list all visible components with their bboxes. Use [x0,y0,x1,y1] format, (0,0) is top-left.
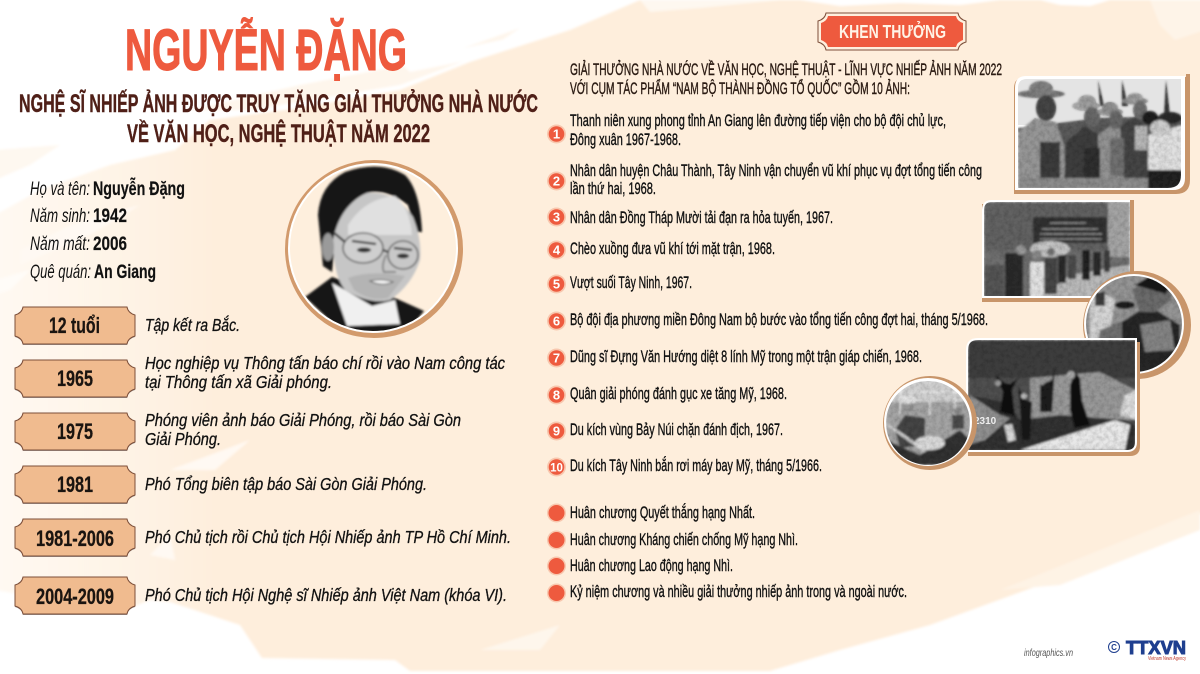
medal 3 [547,556,733,576]
timeline row: 1975: Giải Phóng. [145,429,221,449]
award heading: VỚI CỤM TÁC PHẨM “NAM BỘ THÀNH ĐỒNG TỔ QUỐC” GỒM 10 ẢNH: [570,78,910,98]
subtitle: NGHỆ SĨ NHIẾP ẢNH ĐƯỢC TRUY TẶNG GIẢI THƯỞNG NHÀ NƯỚC [19,88,538,118]
item 4: 4 [553,242,561,258]
section badge: khen thưởng [818,13,966,50]
item 5: 5 [553,276,560,292]
timeline row: 1965: 1965 [57,366,93,391]
item 8: Quân giải phóng đánh gục xe tăng Mỹ, 1968. [570,385,787,403]
medal 4 [547,583,907,602]
timeline row: 1975 [15,410,461,451]
logo: TTXVN: C [1111,643,1117,652]
timeline row: 12 tuổi: Tập kết ra Bắc. [145,315,240,335]
personal details: Họ và tên: [30,179,90,200]
item 1: 1 [553,126,560,142]
photo: crashed aircraft with guerrillas [966,338,1140,456]
item 6: Bộ đội địa phương miền Đông Nam bộ bước vào tổng tiến công đợt hai, tháng 5/1968. [570,311,988,329]
item 10 [547,456,822,476]
personal details: Nguyễn Đặng [93,178,185,200]
timeline row: 2004-2009: Phó Chủ tịch Hội Nghệ sĩ Nhiếp ảnh Việt Nam (khóa VI). [145,585,507,605]
timeline row: 12 tuổi: 12 tuổi [49,313,100,338]
item 8: 8 [553,388,560,402]
item 2: lần thứ hai, 1968. [570,180,656,198]
medals list [547,503,907,602]
item 7 [547,348,922,368]
portrait photo [285,160,463,338]
item 6: 6 [553,314,560,328]
personal details: An Giang [94,262,156,283]
item 2: 2 [553,174,560,188]
photo: soldiers lined up [1014,74,1190,194]
item 5: Vượt suối Tây Ninh, 1967. [570,274,692,292]
logo: TTXVN [1108,638,1186,662]
logo: TTXVN: Vietnam News Agency [1148,656,1186,662]
item 9: 9 [553,424,560,438]
medal 1 [547,503,755,522]
timeline row: 12 tuổi [15,307,240,345]
item 3: Nhân dân Đồng Tháp Mười tải đạn ra hỏa tuyến, 1967. [570,209,833,227]
personal details: 2006 [93,234,127,255]
item 9 [547,421,783,440]
logo: TTXVN: TTXVN [1126,638,1186,658]
timeline row: 1965: tại Thông tấn xã Giải phóng. [145,372,332,392]
personal details [30,178,185,283]
item 8 [547,385,787,404]
timeline [15,307,511,615]
item 9: Du kích vùng Bảy Núi chặn đánh địch, 1967. [570,421,783,439]
title: NGUYỄN ĐẶNG [125,18,407,83]
photo: crashed aircraft with guerrillas: 2310 [974,416,997,427]
item 5 [547,274,692,294]
timeline row: 2004-2009: 2004-2009 [36,584,114,609]
timeline row: 1981-2006 [15,519,511,557]
medal 1: Huân chương Quyết thắng hạng Nhất. [570,503,755,522]
timeline row: 1981: 1981 [57,472,93,497]
source credit: infographics.vn [1024,648,1073,659]
item 4 [547,240,775,260]
medal 4: Kỷ niệm chương và nhiều giải thưởng nhiếp ảnh trong và ngoài nước. [570,583,907,601]
personal details: Năm mất: [30,234,90,255]
award heading [570,60,1002,98]
item 1: Thanh niên xung phong tỉnh An Giang lên đường tiếp viện cho bộ đội chủ lực, [570,112,946,130]
medal 2: Huân chương Kháng chiến chống Mỹ hạng Nhì. [570,531,798,549]
item 7: 7 [553,350,560,366]
timeline row: 1965: Học nghiệp vụ Thông tấn báo chí rồi vào Nam công tác [145,353,505,373]
subtitle: VỀ VĂN HỌC, NGHỆ THUẬT NĂM 2022 [127,118,430,148]
item 3: 3 [553,210,560,224]
item 1 [547,112,946,149]
medal 3: Huân chương Lao động hạng Nhì. [570,557,733,575]
item 6 [547,311,988,330]
item 10: Du kích Tây Ninh bắn rơi máy bay Mỹ, tháng 5/1966. [570,456,822,475]
item 3 [547,208,833,227]
timeline row: 1981: Phó Tổng biên tập báo Sài Gòn Giải Phóng. [145,474,427,494]
medal 2 [547,530,798,550]
timeline row: 1965 [15,353,505,398]
photo: villagers marching under banner [982,200,1134,302]
item 2 [547,162,982,198]
timeline row: 1975: 1975 [57,419,93,444]
timeline row: 1981 [15,466,427,504]
item 4: Chèo xuồng đưa vũ khí tới mặt trận, 1968. [570,240,775,258]
item 1: Đông xuân 1967-1968. [570,131,681,149]
photo: circular portrait of soldier [1083,271,1191,379]
item 7: Dũng sĩ Đựng Văn Hướng diệt 8 lính Mỹ trong một trận giáp chiến, 1968. [570,348,922,366]
personal details: Năm sinh: [30,206,90,227]
personal details: 1942 [93,206,127,227]
timeline row: 1975: Phóng viên ảnh báo Giải Phóng, rồi báo Sài Gòn [145,410,461,430]
timeline row: 1981-2006: Phó Chủ tịch rồi Chủ tịch Hội Nhiếp ảnh TP Hồ Chí Minh. [145,527,511,547]
numbered photo list [547,112,988,476]
photo: circular rower on boat [883,376,977,470]
timeline row: 2004-2009 [15,577,507,615]
item 2: Nhân dân huyện Châu Thành, Tây Ninh vận chuyển vũ khí phục vụ đợt tổng tiến công [570,162,982,180]
item 10: 10 [550,462,563,474]
personal details: Quê quán: [30,262,91,283]
subtitle [19,88,538,148]
timeline row: 1981-2006: 1981-2006 [36,526,114,551]
section badge: khen thưởng: KHEN THƯỞNG [839,21,946,42]
